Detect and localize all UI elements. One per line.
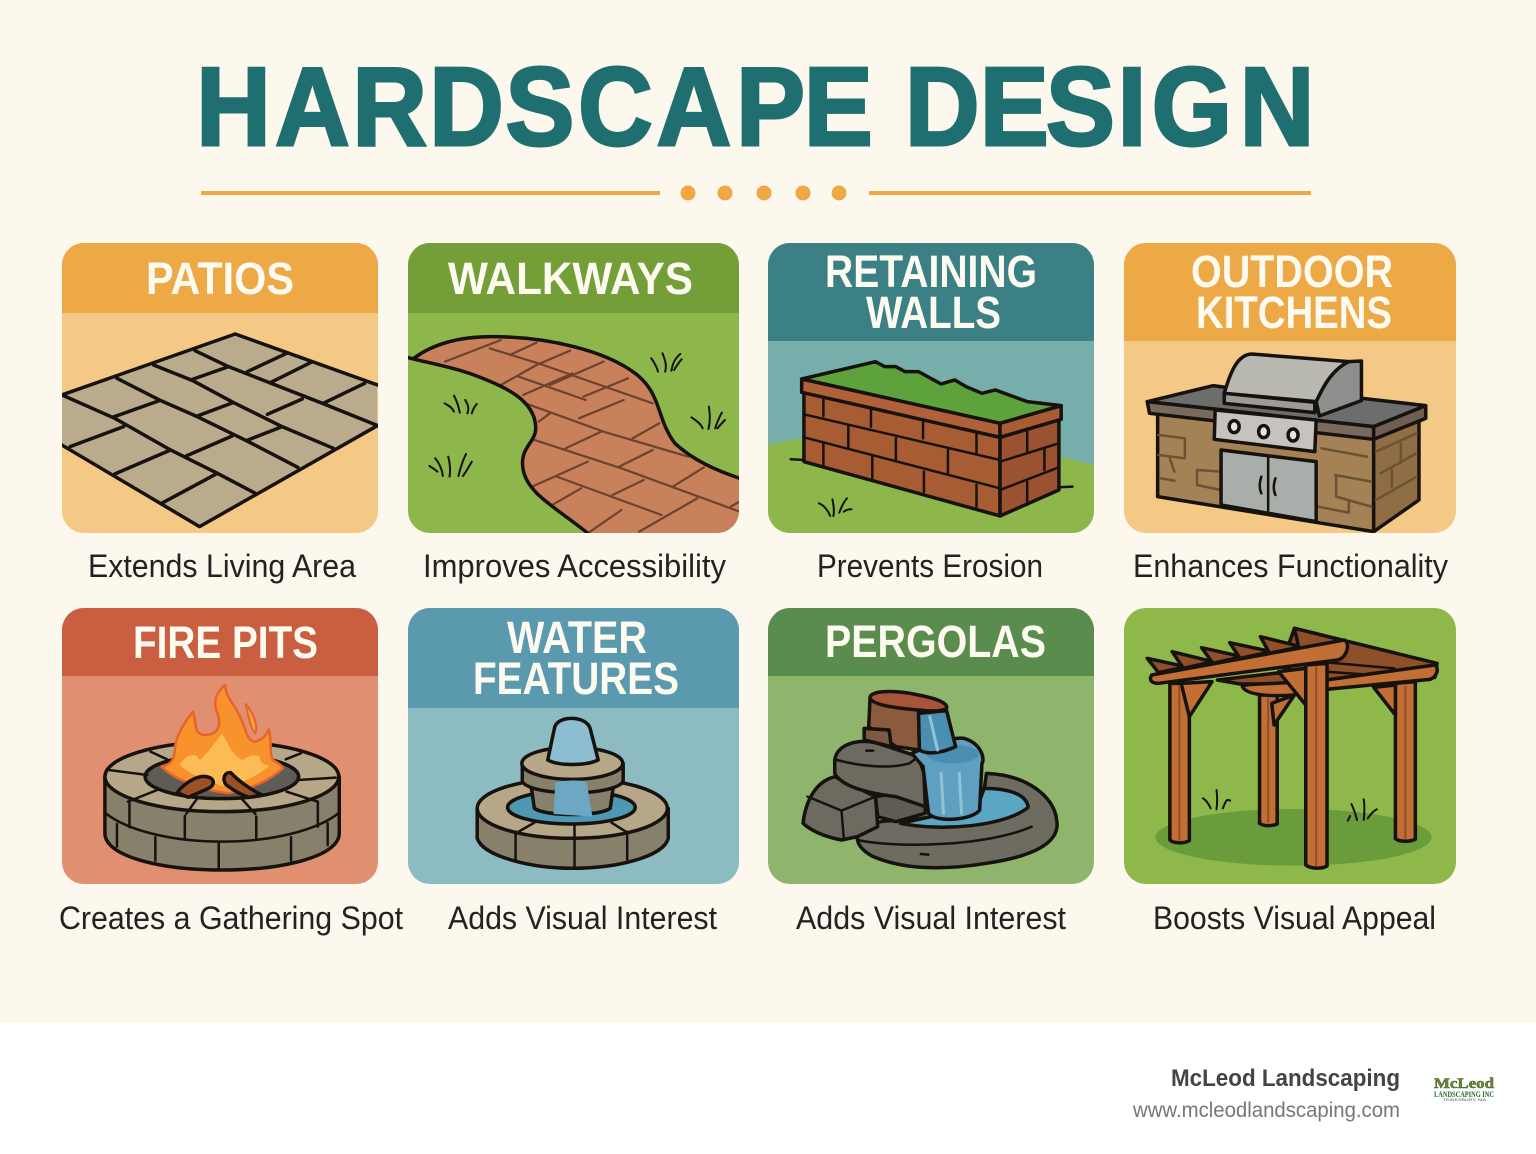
caption: outdoor kitchens: Enhances Functionality [1133, 548, 1448, 584]
panel: pergolas (rock waterfall) [768, 608, 1094, 936]
caption: pergola: Boosts Visual Appeal [1153, 900, 1436, 936]
heading: water features [473, 612, 679, 704]
panel: pergola illustration [1124, 608, 1456, 936]
icon: fire pit [105, 685, 339, 870]
heading: outdoor kitchens: OUTDOOR [1191, 246, 1393, 297]
caption: rock waterfall: Adds Visual Interest [796, 900, 1066, 936]
heading: outdoor kitchens [1191, 246, 1393, 338]
panel: retaining walls [767, 243, 1095, 584]
panel: outdoor kitchens [1124, 243, 1456, 584]
title divider [201, 186, 1311, 200]
heading: outdoor kitchens: KITCHENS [1196, 287, 1392, 338]
heading: water features: WATER [507, 612, 647, 663]
icon: wooden pergola [1147, 628, 1437, 868]
heading: retaining walls: WALLS [866, 287, 1001, 338]
heading: fire pits: FIRE PITS [133, 617, 318, 668]
heading: walkways: WALKWAYS [448, 253, 693, 304]
title: HARDSCAPE DESIGN [196, 45, 1314, 169]
icon: brick retaining wall [767, 362, 1095, 533]
footer [0, 1023, 1536, 1154]
heading: patios: PATIOS [146, 253, 294, 304]
icon: outdoor kitchen grill [1147, 354, 1426, 532]
caption: fire pits: Creates a Gathering Spot [59, 900, 403, 936]
caption: walkways: Improves Accessibility [423, 548, 726, 584]
heading: retaining walls: RETAINING [825, 246, 1037, 297]
caption: retaining walls: Prevents Erosion [817, 548, 1043, 584]
logo: LANDSCAPING INC [1434, 1089, 1494, 1099]
panel: walkways [407, 243, 740, 584]
icon: paving stones [59, 334, 380, 527]
icon: rock waterfall [803, 692, 1057, 868]
footer website: www.mcleodlandscaping.com [1132, 1099, 1400, 1122]
heading: retaining walls [825, 246, 1037, 338]
caption: water features: Adds Visual Interest [448, 900, 717, 936]
panel: water features [408, 608, 739, 936]
logo: McLeod [1434, 1076, 1495, 1092]
panel: patios [59, 243, 380, 584]
logo [1434, 1076, 1495, 1102]
logo: TEWKSBURY, MA [1443, 1097, 1486, 1102]
heading: pergolas: PERGOLAS [825, 616, 1046, 667]
footer company name: McLeod Landscaping [1171, 1065, 1400, 1092]
icon: brick path [407, 337, 740, 533]
caption: patios: Extends Living Area [88, 548, 356, 584]
panel: fire pits [59, 608, 403, 936]
icon: stone fountain [477, 718, 668, 868]
heading: water features: FEATURES [473, 653, 679, 704]
